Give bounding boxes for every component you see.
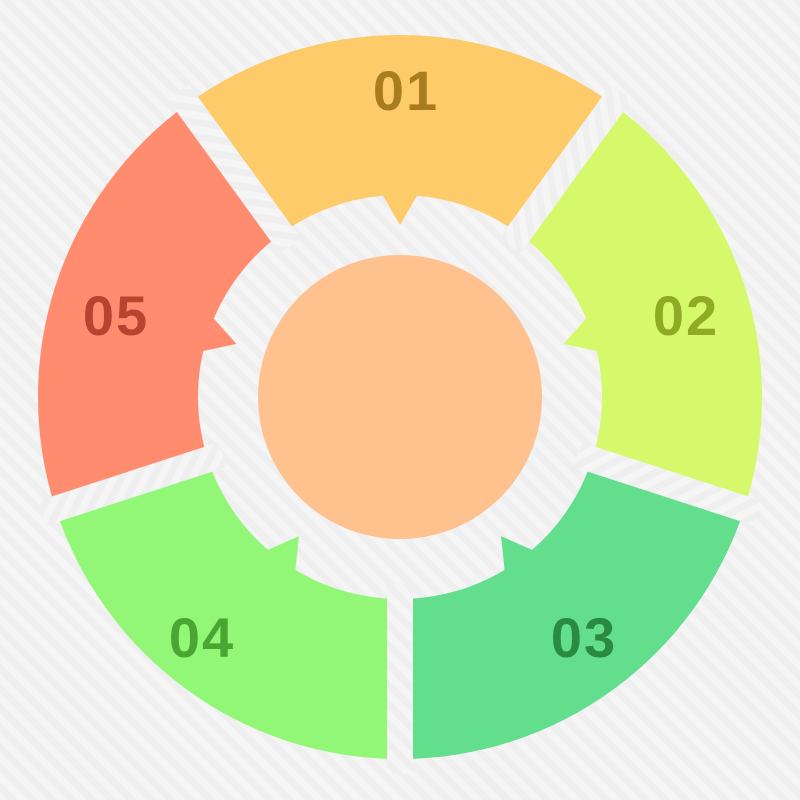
segment 03 [324,404,785,800]
label 05: 05 [83,284,149,347]
segment 02 [490,83,800,549]
label 01: 01 [373,59,439,122]
label 02: 02 [653,284,719,347]
segment 01 [187,35,613,234]
label 04: 04 [169,606,235,669]
label 03: 03 [551,606,617,669]
segment 05 [0,83,310,549]
center circle [258,255,542,539]
segment 04 [15,404,476,800]
